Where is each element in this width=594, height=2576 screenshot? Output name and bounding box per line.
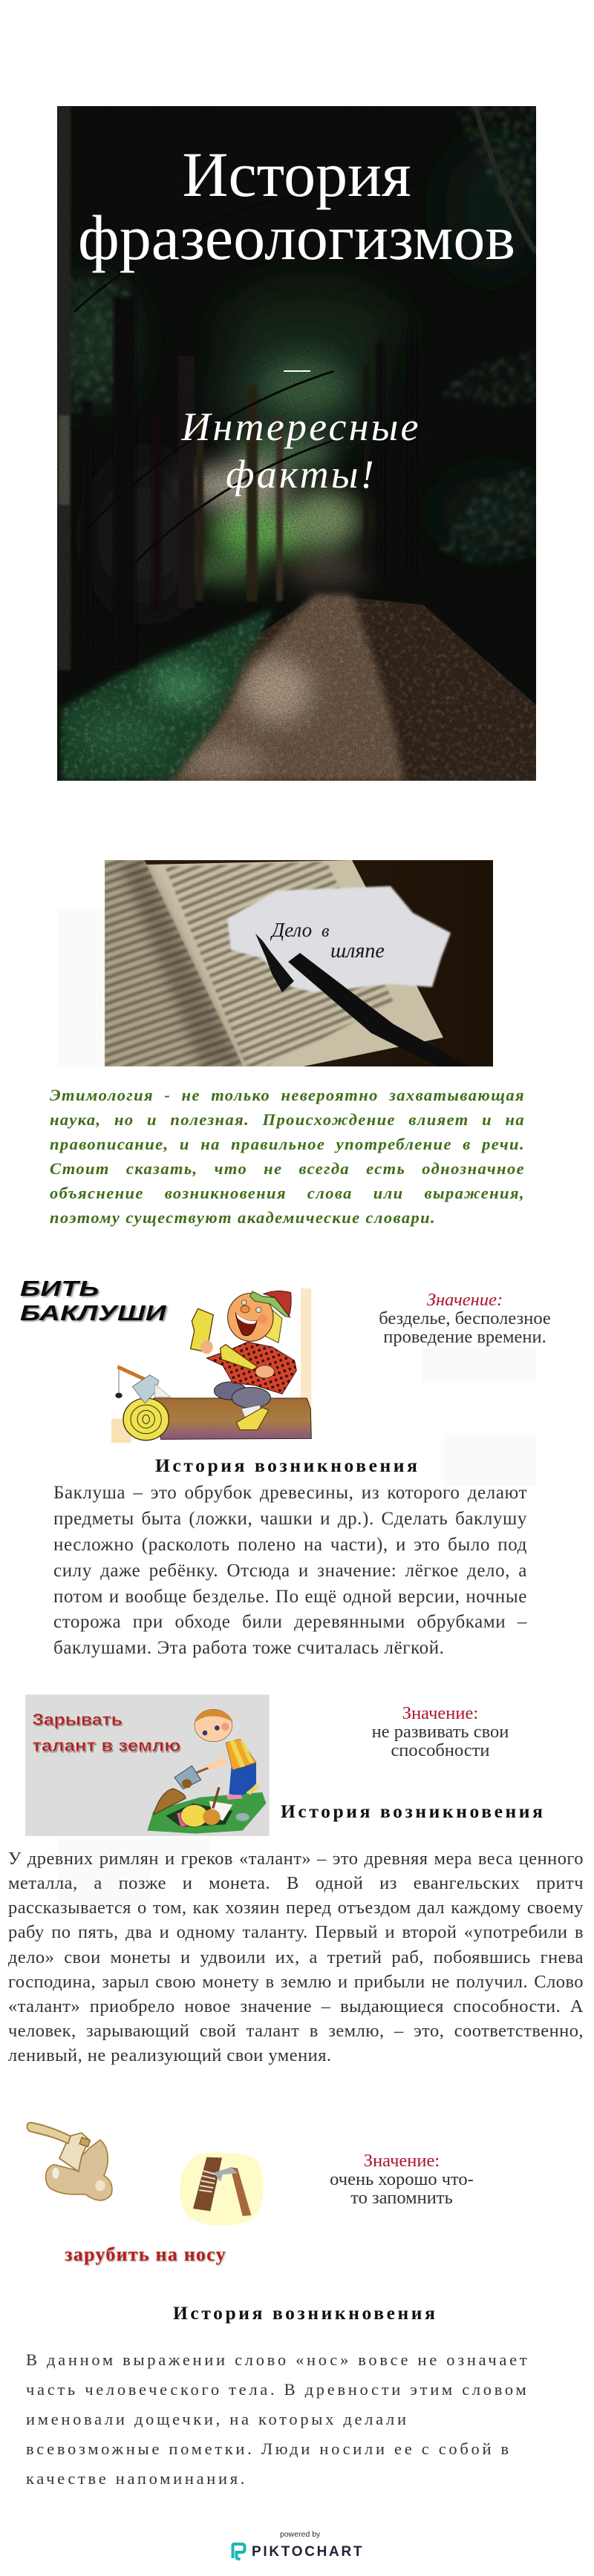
icon: notched board and hatchet <box>180 2153 264 2226</box>
text block: talent history: рассказывается о том, как хозяин перед отъездом дал каждому своему <box>8 1898 584 1918</box>
subtitle: факты! <box>226 452 376 496</box>
writing on note: в <box>322 922 329 941</box>
text block: nose history <box>26 2350 529 2488</box>
title <box>78 139 515 273</box>
powered by: powered by <box>280 2530 320 2539</box>
text block: baklushi history: потом и вообще безделье. По ещё одной версии, ночные <box>53 1587 527 1606</box>
illustration: boy burying talents <box>25 1694 270 1836</box>
text block: talent history: У древних римлян и греков «талант» – это древняя мера веса ценного <box>8 1849 584 1869</box>
branches <box>74 106 536 564</box>
text block: baklushi history: несложно (расколоть полено на части), и это было под <box>53 1535 527 1555</box>
meaning: бить баклуши <box>379 1290 551 1347</box>
illustration: boy on a log <box>111 1288 312 1443</box>
meaning: зарубить на носу: очень хорошо что- <box>330 2169 474 2189</box>
writing on note: Дело <box>270 919 312 941</box>
heading: История возникновения <box>173 2302 438 2324</box>
meaning: бить баклуши: безделье, бесполезное <box>379 1308 551 1328</box>
wordmark: PIKTOCHART <box>252 2544 364 2559</box>
centre fog <box>186 360 368 585</box>
icon: logo <box>232 2543 247 2560</box>
illustration: boy burying talents: Зарывать <box>33 1711 123 1730</box>
panel: forest cover <box>57 106 536 781</box>
footer: piktochart credit <box>232 2530 364 2560</box>
text block: nose history: качестве напоминания. <box>26 2469 247 2488</box>
heading: История возникновения <box>281 1800 545 1822</box>
text block: etymology intro: поэтому существуют академические словари. <box>50 1208 436 1227</box>
subtitle: Интересные <box>181 404 421 449</box>
heading: История возникновения <box>155 1455 420 1476</box>
text block: talent history: человек, зарывающий свой талант в землю, – это, соответственно, <box>8 2021 584 2041</box>
meaning: зарубить на носу <box>330 2151 474 2208</box>
text block: nose history: именовали дощечки, на которых делали <box>26 2410 409 2428</box>
text block: etymology intro: правописание, и на правильное употребление в речи. <box>50 1135 525 1153</box>
grass <box>61 609 272 781</box>
title: История <box>182 139 411 210</box>
pale patch <box>57 1866 151 1906</box>
phrase title <box>20 1276 169 1325</box>
text block: talent history: господина, зарыл свою монету в землю и прибыли не получил. Слово <box>8 1972 584 1992</box>
text block: baklushi history: баклушами. Эта работа тоже считалась лёгкой. <box>53 1638 445 1658</box>
image: forest path photo <box>57 106 536 781</box>
writing on note: шляпе <box>330 940 385 963</box>
pale backdrop <box>57 908 105 1068</box>
image: open book with note and pen <box>105 860 493 1066</box>
meaning: бить баклуши: проведение времени. <box>383 1327 546 1347</box>
meaning: зарубить на носу: то запомнить <box>350 2188 453 2208</box>
text block: talent history: дело» свои монеты и удвоили их, а третий раб, побоявшись гнева <box>8 1947 584 1967</box>
foliage specks <box>70 106 536 563</box>
dash divider <box>284 370 310 372</box>
text block: talent history: ленивый, не реализующий свои умения. <box>8 2045 331 2065</box>
meaning: зарывать талант <box>372 1703 509 1760</box>
illustration: boy burying talents: талант в землю <box>33 1737 182 1756</box>
phrase title: зарубить на носу <box>65 2244 226 2265</box>
text block: baklushi history: сторожа при обходе били деревянными обрубками – <box>53 1612 527 1632</box>
text block: etymology intro: наука, но и полезная. Происхождение влияет и на <box>50 1110 525 1129</box>
text block: etymology intro <box>50 1086 525 1227</box>
pale patch <box>422 1347 536 1381</box>
ground <box>148 594 536 781</box>
trunks <box>57 106 416 670</box>
note <box>227 886 451 992</box>
meaning: зарывать талант: не развивать свои <box>372 1722 509 1742</box>
text block: baklushi history: Баклуша – это обрубок древесины, из которого делают <box>53 1483 527 1503</box>
text block: talent history: рабу по пять, два и одному таланту. Первый и второй «употребили в <box>8 1922 584 1942</box>
title: фразеологизмов <box>78 202 515 273</box>
foliage glows <box>62 141 542 609</box>
text block: etymology intro: Стоит сказать, что не всегда есть однозначное <box>50 1159 525 1178</box>
meaning: бить баклуши: Значение: <box>427 1290 503 1310</box>
panel: зарубить на носу illustrations <box>27 2122 264 2226</box>
subtitle <box>181 404 421 496</box>
text block: talent history: металла, а позже и монета. В одной из евангельских притч <box>8 1873 584 1893</box>
phrase title: БИТЬ <box>20 1276 99 1300</box>
text block: etymology intro: объяснение возникновения слова или выражения, <box>50 1184 525 1202</box>
phrase title: БАКЛУШИ <box>20 1302 166 1325</box>
text block: etymology intro: Этимология - не только невероятно захватывающая <box>50 1086 525 1104</box>
text block: nose history: В данном выражении слово «нос» вовсе не означает <box>26 2350 529 2369</box>
pale patch <box>443 1433 536 1487</box>
illustration: boy burying talents: Зарывать <box>32 1710 123 1728</box>
text block: nose history: всевозможные пометки. Люди носили ее с собой в <box>26 2439 512 2458</box>
writing on note <box>270 919 385 963</box>
text block: baklushi history <box>53 1483 527 1658</box>
text block: baklushi history: предметы быта (ложки, чашки и др.). Сделать баклушу <box>53 1509 527 1529</box>
text block: talent history <box>8 1849 584 2065</box>
illustration: boy burying talents: талант в землю <box>32 1737 180 1755</box>
text block: baklushi history: силу даже ребёнку. Отсюда и значение: лёгкое дело, а <box>53 1561 527 1581</box>
left page <box>105 860 243 1066</box>
right page <box>146 860 443 1066</box>
pale patch <box>57 1838 209 1866</box>
text block: nose history: часть человеческого тела. В древности этим словом <box>26 2380 529 2399</box>
icon: watercolour axe <box>27 2123 112 2200</box>
panel: book photo <box>105 860 493 1066</box>
panel: бить баклуши <box>20 1276 312 1443</box>
meaning: зарывать талант: способности <box>391 1740 490 1760</box>
pen <box>255 934 294 992</box>
meaning: зарубить на носу: Значение: <box>364 2151 440 2171</box>
meaning: зарывать талант: Значение: <box>402 1703 478 1723</box>
text block: talent history: «талант» приобрело новое значение – выдающиеся способности. А <box>8 1996 584 2016</box>
